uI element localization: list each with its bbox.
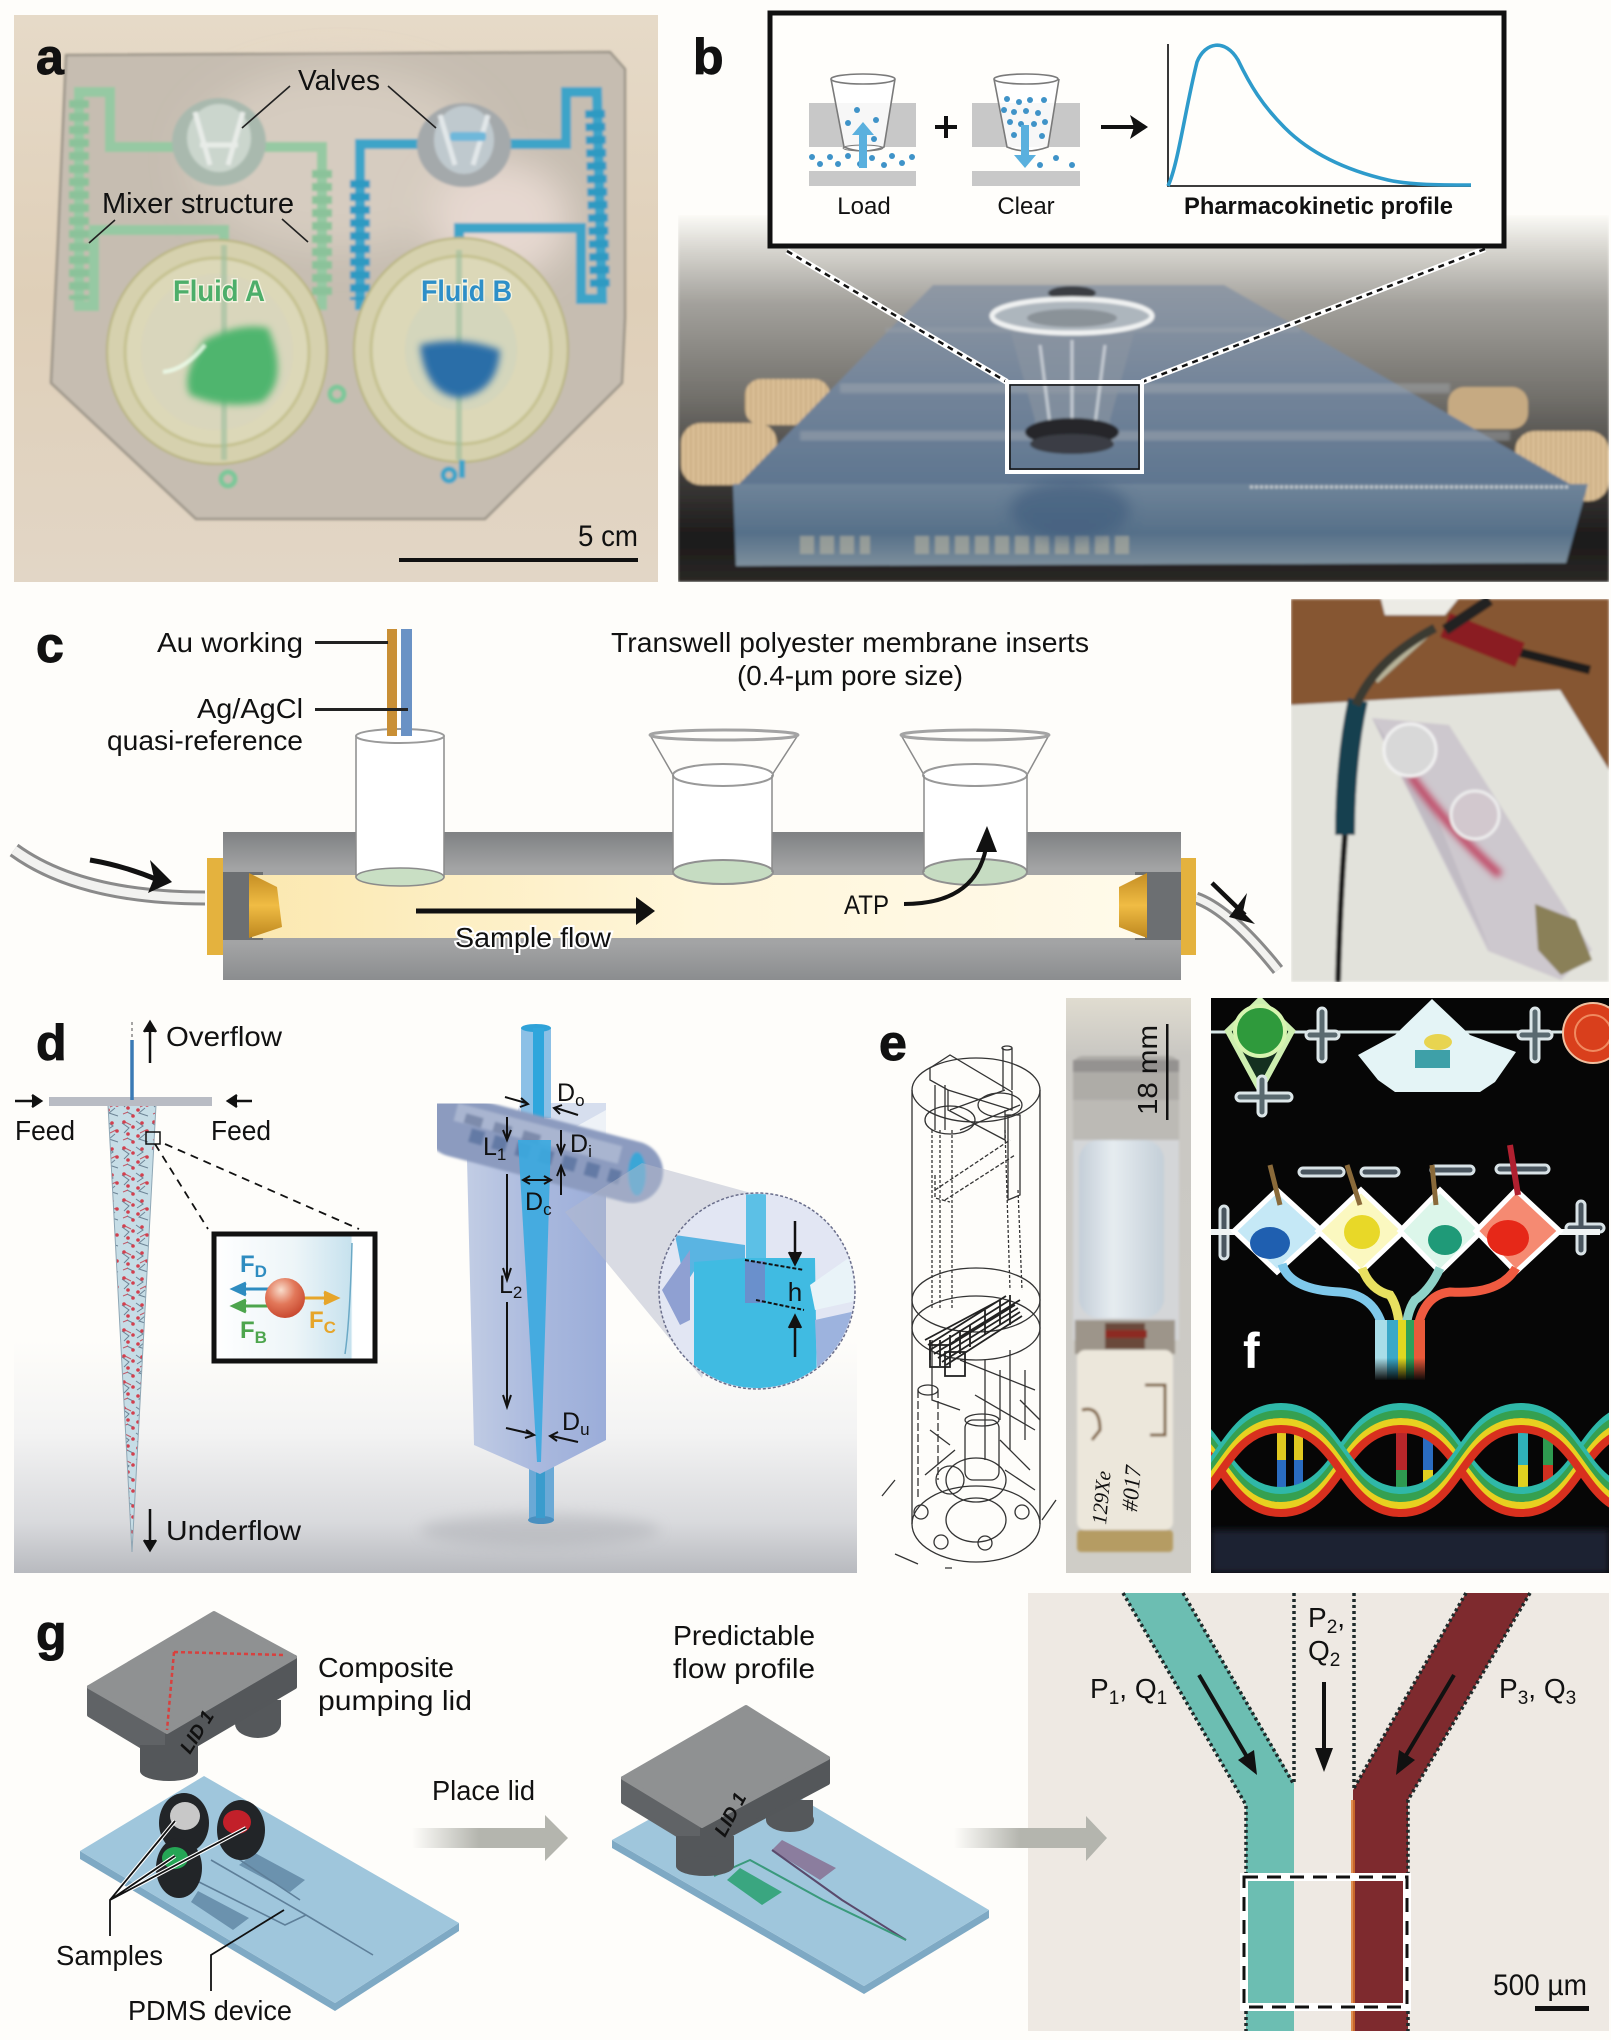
- photo backdrop: [14, 15, 658, 582]
- label: valves with leaders: [242, 65, 436, 128]
- ATP arrow: [904, 826, 997, 904]
- panel d: hydrocyclone: [14, 1015, 860, 1573]
- label: fluid B: Fluid B: [421, 275, 512, 308]
- label: fluid A: Fluid A: [173, 275, 265, 308]
- carpet texture: [1211, 1530, 1609, 1573]
- bottom ports: [221, 472, 235, 486]
- force diagram inset: F: [240, 1317, 255, 1344]
- sample flow arrow: [416, 897, 655, 925]
- dotted channel walls: [1123, 1593, 1530, 2031]
- dimension h: h: [788, 1277, 802, 1307]
- cup with electrodes: [356, 729, 444, 886]
- green arrow: [233, 1300, 268, 1312]
- inset box: [770, 13, 1504, 246]
- slab front: [733, 484, 1588, 566]
- left feed: Feed: [15, 1115, 75, 1146]
- right feed: Feed: [211, 1115, 271, 1146]
- dashed measurement box: [1244, 1877, 1407, 2007]
- background gradient: [14, 1340, 857, 1573]
- lid above: [89, 1613, 295, 1781]
- label transwell inserts: [611, 627, 1089, 691]
- micrograph background: [1028, 1593, 1609, 2031]
- label P1 Q1: 1: [1109, 1688, 1119, 1709]
- outlet arrow: [1212, 883, 1255, 924]
- label P3 Q3: P: [1499, 1673, 1518, 1704]
- device dimension labels: D: [570, 1130, 588, 1158]
- plus sign: [935, 116, 957, 138]
- inlet needles: [1270, 1165, 1436, 1205]
- force labels: F: [240, 1251, 255, 1278]
- red stream: [1353, 1593, 1530, 2031]
- device: [1372, 718, 1592, 980]
- label P3 Q3: 3: [1518, 1688, 1528, 1709]
- label P2 Q2: Q: [1308, 1635, 1330, 1666]
- red clip and wires: [1518, 648, 1592, 676]
- label P2 Q2: 2: [1330, 1650, 1340, 1671]
- panel c: electrochemical flow device: [14, 599, 1609, 982]
- label composite pumping lid: pumping lid: [318, 1685, 472, 1716]
- slab top: [739, 285, 1570, 484]
- label P3 Q3: 3: [1566, 1688, 1576, 1709]
- left feed: [15, 1095, 75, 1146]
- device dimension arrows: [503, 1097, 578, 1442]
- force diagram inset: B: [255, 1328, 267, 1347]
- channel dark ends: [223, 872, 1181, 940]
- label place lid: Place lid: [432, 1775, 535, 1806]
- panel letter c: c: [36, 617, 64, 673]
- label P2 Q2: 2: [1327, 1617, 1337, 1638]
- force diagram inset: F: [309, 1307, 324, 1334]
- device with lid placed: [612, 1707, 989, 1994]
- label composite pumping lid: [318, 1652, 472, 1716]
- overflow arrow and label: [144, 1021, 283, 1063]
- label P3 Q3: , Q: [1528, 1673, 1566, 1704]
- handwritten tube label: #017: [1117, 1463, 1146, 1512]
- arrow to chart: [1101, 115, 1148, 139]
- wood surface: [1291, 599, 1609, 770]
- particle: [265, 1278, 305, 1318]
- label composite pumping lid: Composite: [318, 1652, 454, 1683]
- scale bar 5 cm: 5 cm: [578, 520, 638, 553]
- label Ag/AgCl quasi-reference: Ag/AgCl: [197, 693, 303, 724]
- transwell insert 2: [901, 730, 1049, 885]
- device base left: [80, 1776, 459, 2011]
- panel f: black background chips and DNA helix: [1211, 998, 1609, 1573]
- blue drag arrow: [233, 1283, 268, 1295]
- orange arrow: [300, 1292, 337, 1304]
- cylinder side port: [456, 1112, 646, 1196]
- device dimension labels: D: [525, 1188, 543, 1216]
- load diagram: [809, 74, 916, 186]
- lower pipe: [529, 1466, 554, 1520]
- device with lid placed: LID 1: [711, 1789, 751, 1840]
- blue channel: [360, 92, 602, 310]
- scale bar 18 mm: 18 mm: [1132, 1025, 1163, 1115]
- metal end: [1535, 904, 1592, 975]
- label load: Load: [837, 193, 891, 220]
- force diagram inset: [214, 1234, 375, 1361]
- label P1 Q1: , Q: [1119, 1673, 1157, 1704]
- label: mixer structure with leaders: [89, 188, 308, 243]
- label P1 Q1: 1: [1157, 1688, 1167, 1709]
- chip body: [51, 52, 625, 519]
- arrow place lid: [412, 1815, 568, 1861]
- channel block: [223, 832, 1181, 980]
- panel a: printed mixer chip photo: [14, 15, 658, 582]
- label: valves with leaders: Valves: [298, 65, 380, 97]
- device dimension labels: o: [575, 1091, 585, 1110]
- label Ag/AgCl quasi-reference: quasi-reference: [107, 725, 303, 756]
- label: mixer structure with leaders: Mixer structure: [102, 188, 294, 220]
- label transwell inserts: (0.4-µm pore size): [737, 660, 963, 691]
- simulation cone: [49, 1022, 212, 1552]
- label predictable flow profile: flow profile: [673, 1653, 815, 1684]
- sample channel: [252, 875, 1145, 938]
- device dimension labels: u: [580, 1420, 590, 1439]
- panel letter b: b: [693, 29, 724, 85]
- valves: [172, 98, 266, 186]
- fluid blobs: [187, 326, 278, 405]
- underflow arrow and label: Underflow: [166, 1515, 302, 1546]
- photo of device with clips: [1291, 599, 1609, 982]
- label samples: Samples: [56, 1940, 163, 1971]
- label pharmacokinetic profile: Pharmacokinetic profile: [1184, 193, 1453, 220]
- transwell insert 1: [650, 730, 798, 884]
- device dimension labels: 2: [513, 1283, 522, 1302]
- converging channels: [1278, 1262, 1520, 1320]
- label transwell inserts: Transwell polyester membrane inserts: [611, 627, 1089, 658]
- force labels: D: [255, 1262, 267, 1281]
- teal stream: [1123, 1593, 1294, 2031]
- magnifier circle: [659, 1190, 860, 1392]
- black cable and teal clip: [1338, 835, 1345, 982]
- device dimension labels: D: [562, 1408, 580, 1436]
- tan knobs: [745, 379, 830, 425]
- wireframe drawing: [882, 1046, 1056, 1568]
- top row chips: [1200, 999, 1611, 1112]
- callout rectangle on insert: [1007, 382, 1142, 472]
- label clear: Clear: [997, 193, 1055, 220]
- panel letter e: e: [879, 1015, 907, 1071]
- scale bar 5 cm: [399, 520, 638, 562]
- panel b: pharmacokinetic chip photo and inset: [678, 13, 1609, 582]
- pharmacokinetic chart: [1168, 44, 1471, 186]
- gold cones: [249, 873, 1147, 938]
- device dimension labels: L: [499, 1271, 513, 1299]
- panel e: NMR probe: [879, 998, 1191, 1573]
- photo: [678, 215, 1609, 582]
- upper pipe: [521, 1028, 551, 1118]
- device dimension labels: [483, 1079, 592, 1439]
- label predictable flow profile: [673, 1620, 815, 1684]
- label P1 Q1: P: [1090, 1673, 1109, 1704]
- device dimension labels: i: [588, 1142, 592, 1161]
- handwritten tube label: [1087, 1463, 1146, 1525]
- right feed: [211, 1095, 271, 1146]
- probe photo: [1066, 998, 1191, 1573]
- orange stream edge: [1351, 1800, 1355, 2031]
- green channel: [79, 92, 322, 310]
- gold connectors: [207, 858, 1196, 955]
- panel letter g: g: [36, 1605, 67, 1661]
- zoom dashed lines: [146, 1132, 359, 1229]
- label PDMS device: PDMS device: [128, 1995, 292, 2026]
- panel letter a: a: [36, 29, 65, 85]
- samples leader: [110, 1821, 246, 1936]
- overflow arrow and label: Overflow: [166, 1021, 283, 1052]
- inlet tubing: [14, 850, 205, 898]
- arrow to micrograph: [954, 1816, 1107, 1861]
- glass insert: [1048, 286, 1096, 300]
- clear diagram: [972, 74, 1080, 186]
- underflow arrow and label: [144, 1509, 302, 1550]
- cyan vortex: [518, 1140, 551, 1462]
- handwritten tube label: 129Xe: [1087, 1470, 1116, 1525]
- label ATP: ATP: [844, 890, 889, 920]
- DNA helix: [1161, 1407, 1611, 1513]
- panel letter d: d: [36, 1015, 67, 1071]
- stem of channels: [1375, 1320, 1425, 1380]
- zoom leader lines: [787, 249, 1485, 382]
- panel letter f: f: [1243, 1323, 1260, 1379]
- scale bar 500 um: 500 µm: [1493, 1969, 1587, 2002]
- label Au working: Au working: [157, 627, 303, 658]
- middle row diamonds: [1211, 1145, 1600, 1272]
- device dimension labels: D: [557, 1079, 575, 1107]
- magnifier cone: [565, 1163, 751, 1378]
- electrodes: [315, 629, 412, 736]
- panel g: composite pumping lid: [36, 1593, 1609, 2031]
- PDMS device leader: [211, 1910, 284, 1991]
- force diagram inset: C: [324, 1318, 336, 1337]
- device render: [420, 1024, 860, 1546]
- dimension h: [745, 1221, 804, 1357]
- label P2 Q2: ,: [1337, 1602, 1345, 1633]
- lid above: LID 1: [176, 1707, 219, 1758]
- outlet tubing: [1196, 898, 1278, 970]
- sample wells: [156, 1793, 265, 1898]
- flow arrows: [1199, 1675, 1454, 1775]
- main block: [466, 1118, 606, 1474]
- label P2 Q2: [1308, 1602, 1345, 1671]
- device dimension labels: 1: [497, 1145, 506, 1164]
- label P2 Q2: P: [1308, 1602, 1327, 1633]
- inlet arrow: [90, 860, 172, 893]
- wireframe dense coil region: [925, 1295, 1022, 1376]
- label Ag/AgCl quasi-reference: [107, 693, 303, 756]
- device dimension labels: c: [543, 1200, 552, 1219]
- label sample flow: Sample flow: [455, 922, 612, 953]
- reservoirs: [107, 240, 327, 464]
- device dimension labels: L: [483, 1133, 497, 1161]
- label predictable flow profile: Predictable: [673, 1620, 815, 1651]
